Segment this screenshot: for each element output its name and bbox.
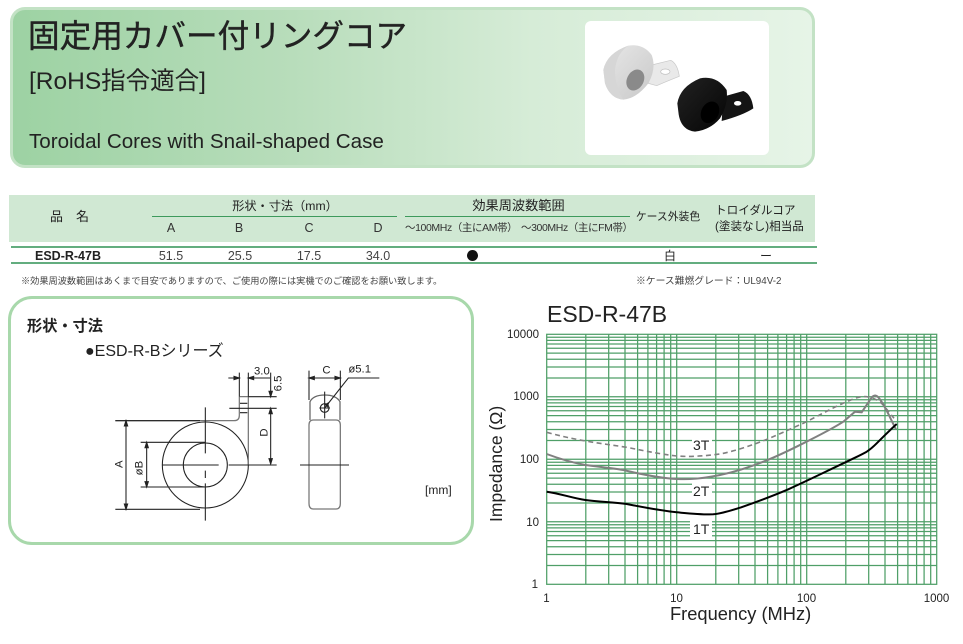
black core (677, 78, 753, 132)
row: frequency dot (467, 250, 478, 261)
x axis tick labels (543, 593, 949, 605)
title: 固定用カバー付リングコア (28, 18, 407, 54)
header rule: dimensions (152, 216, 397, 217)
y axis tick labels (507, 329, 539, 591)
curve 3T (547, 397, 894, 456)
table header band (9, 195, 815, 242)
header: toroidal core equivalent: トロイダルコア (715, 204, 795, 217)
y axis tick labels: 1000 (513, 391, 539, 403)
series label: ●ESD-R-Bシリーズ (85, 343, 224, 360)
row rule bottom (11, 262, 817, 264)
header: product name: 品 名 (50, 209, 89, 224)
curve labels: 1T (693, 521, 710, 537)
RoHS subtitle: [RoHS指令適合] (29, 68, 206, 95)
x axis tick labels: 100 (797, 593, 816, 605)
header: toroidal core equivalent: (塗装なし)相当品 (715, 220, 804, 233)
y axis title: Impedance (Ω) (486, 406, 506, 522)
dimension labels: C (322, 364, 331, 376)
white core (603, 45, 679, 100)
y axis tick labels: 1 (532, 579, 538, 591)
column 100MHz: ～100MHz（主にAM帯） (405, 222, 517, 234)
dimensions heading: 形状・寸法 (27, 318, 103, 335)
curve 1T (547, 424, 897, 514)
x axis tick labels: 1000 (924, 593, 949, 605)
header: toroidal core equivalent (715, 204, 804, 233)
unit label: [mm] (425, 483, 452, 497)
row: D value: 34.0 (366, 249, 390, 263)
column B: B (235, 221, 243, 235)
x axis tick labels: 1 (543, 593, 550, 605)
row: C value: 17.5 (297, 249, 321, 263)
side view (300, 371, 379, 509)
dimension labels: A (114, 460, 126, 468)
column D: D (373, 221, 383, 235)
header rule: frequency (405, 216, 630, 217)
y axis tick labels: 10 (526, 517, 539, 529)
dimension drawing (114, 364, 380, 521)
column C: C (304, 221, 314, 235)
curve 2T (547, 396, 896, 479)
dimension labels: øB (134, 461, 146, 475)
product photo (585, 21, 769, 155)
header: case colour: ケース外装色 (636, 211, 700, 223)
row rule top (11, 246, 817, 248)
y axis tick labels: 100 (520, 454, 539, 466)
chart title: ESD-R-47B (547, 301, 667, 327)
x axis title: Frequency (MHz) (670, 603, 811, 624)
row: equivalent: ー (760, 249, 772, 263)
dimension labels (114, 364, 371, 475)
row: A value: 51.5 (159, 249, 183, 263)
header panel (10, 7, 815, 168)
column 300MHz: ～300MHz（主にFM帯） (521, 222, 633, 234)
row: B value: 25.5 (228, 249, 252, 263)
dimension labels: 6.5 (272, 376, 284, 391)
curve labels: 3T (693, 437, 710, 453)
dimension labels: D (258, 428, 270, 437)
curve labels: 2T (693, 483, 710, 499)
English subtitle: Toroidal Cores with Snail-shaped Case (29, 130, 384, 153)
dimension labels: ø5.1 (348, 364, 371, 376)
row: part name: ESD-R-47B (35, 249, 101, 263)
y axis tick labels: 10000 (507, 329, 539, 341)
column A: A (167, 221, 175, 235)
footnote right: ※ケース難燃グレード：UL94V-2 (636, 276, 781, 287)
curve labels (690, 434, 712, 537)
row: colour: 白 (664, 249, 676, 263)
footnote left: ※効果周波数範囲はあくまで目安でありますので、ご使用の際には実機でのご確認をお願い致します。 (21, 276, 442, 286)
header: shape and dimensions: 形状・寸法（mm） (232, 199, 338, 213)
panel: dimensions (8, 296, 474, 545)
header: effective frequency range: 効果周波数範囲 (472, 198, 565, 213)
specification table (9, 195, 817, 264)
grid (547, 334, 937, 584)
front view (115, 373, 277, 521)
dimension labels: 3.0 (254, 365, 270, 377)
x axis tick labels: 10 (670, 593, 683, 605)
